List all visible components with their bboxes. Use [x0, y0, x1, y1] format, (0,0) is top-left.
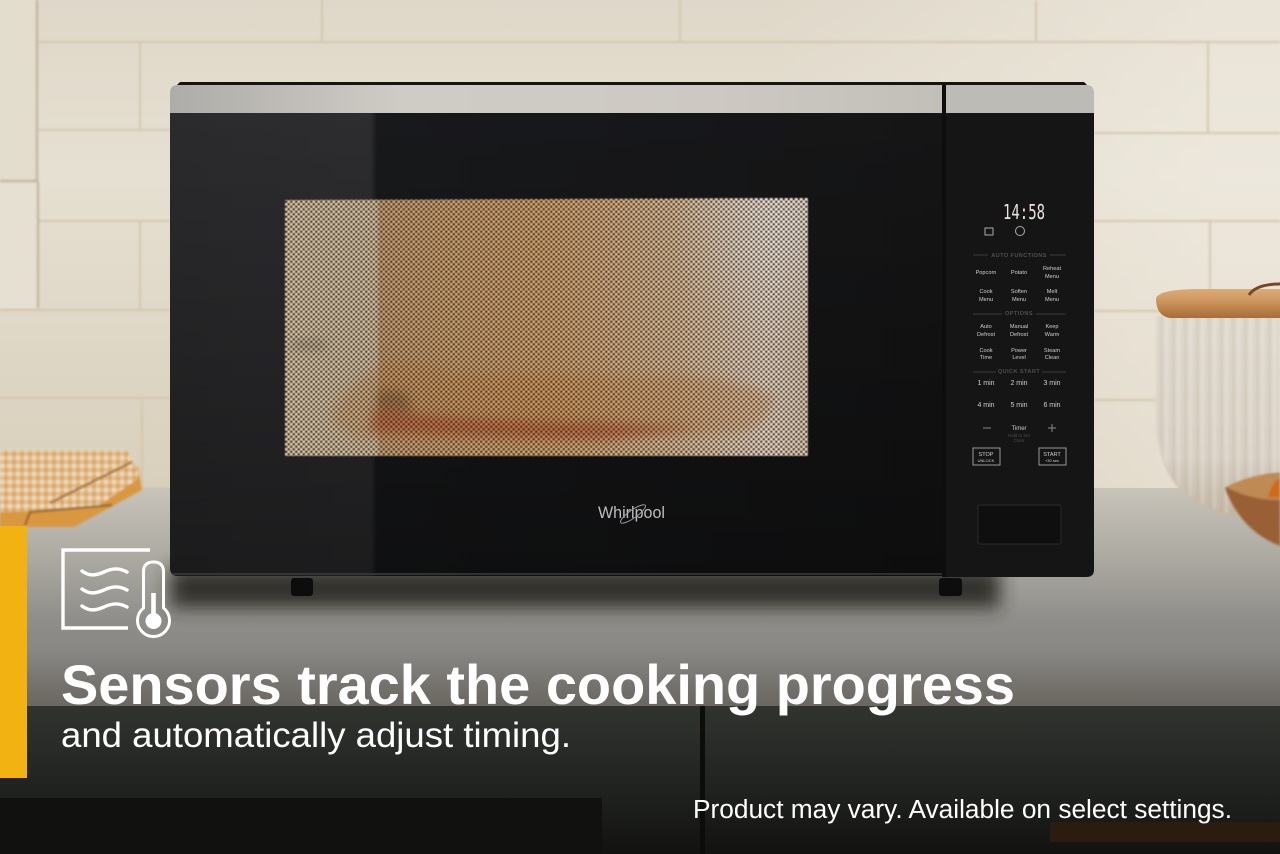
- section: auto functions: Menu: [1045, 274, 1059, 280]
- section: options: Power: [1011, 348, 1027, 354]
- microwave: [170, 82, 1094, 596]
- section: options: Level: [1012, 355, 1026, 361]
- section: options: Auto: [980, 324, 992, 330]
- microwave feet: [291, 578, 962, 596]
- section: options: Defrost: [977, 332, 995, 338]
- section: quick start: QUICK START: [998, 369, 1040, 375]
- section: quick start: 5 min: [1010, 402, 1028, 409]
- section: options: Keep: [1045, 324, 1059, 330]
- icon: sensor waves and thermometer: [63, 550, 169, 636]
- disclaimer: Product may vary. Available on select settings.: [693, 796, 1232, 824]
- section: auto functions: Menu: [1045, 297, 1059, 303]
- section: options: Manual: [1010, 324, 1028, 330]
- cabinets below the counter: [0, 706, 1280, 854]
- section: options: Warm: [1045, 332, 1060, 338]
- stop and start buttons: UNLOCK: [978, 458, 995, 463]
- section: auto functions: Menu: [1012, 297, 1026, 303]
- headline: Sensors track the cooking progress: [61, 653, 1015, 716]
- section: auto functions: Reheat: [1043, 266, 1061, 272]
- status icons: [985, 226, 1024, 236]
- section: options: Time: [980, 355, 992, 361]
- section: auto functions: AUTO FUNCTIONS: [991, 253, 1047, 259]
- subheading: and automatically adjust timing.: [61, 715, 571, 755]
- section: options: Steam: [1044, 348, 1060, 354]
- stop and start buttons: [973, 448, 1066, 465]
- wooden bowl: [1225, 473, 1280, 546]
- control panel body: [946, 113, 1094, 577]
- section: auto functions: Soften: [1011, 289, 1027, 295]
- background: tiled kitchen wall: [0, 0, 1280, 500]
- stop and start buttons: START: [1043, 452, 1061, 458]
- section: auto functions: Cook: [979, 289, 993, 295]
- steel handle strip: [170, 85, 1094, 113]
- timer controls: Timer: [1011, 426, 1027, 432]
- section: quick start: 4 min: [977, 402, 995, 409]
- section: options: OPTIONS: [1005, 311, 1033, 317]
- clock display: 14:58: [1003, 200, 1045, 224]
- folded towel: [0, 451, 142, 527]
- yellow accent bar: [0, 526, 27, 778]
- section: options: Defrost: [1010, 332, 1028, 338]
- section: quick start: 1 min: [977, 380, 995, 387]
- timer controls: [983, 424, 1056, 443]
- section: options: Cook: [979, 348, 993, 354]
- section: quick start: 2 min: [1010, 380, 1028, 387]
- control panel: [973, 200, 1066, 544]
- section: auto functions: Melt: [1047, 289, 1058, 295]
- section: options: Clean: [1045, 355, 1059, 361]
- section: quick start: 3 min: [1043, 380, 1061, 387]
- window with mesh: [285, 198, 808, 456]
- section: auto functions: [973, 253, 1066, 372]
- section: options: [977, 311, 1060, 361]
- door release button: [978, 505, 1061, 544]
- timer controls: Hold to Set: [1008, 433, 1031, 438]
- stop and start buttons: STOP: [979, 452, 994, 458]
- food behind the mesh: [293, 345, 775, 441]
- section: auto functions: Menu: [979, 297, 993, 303]
- microwave top edge: [174, 82, 1090, 88]
- countertop: [0, 488, 1280, 708]
- section: auto functions: Potato: [1011, 270, 1027, 276]
- section: quick start: [977, 369, 1061, 409]
- ceramic canister with wooden lid: [1156, 284, 1280, 516]
- stop and start buttons: +30 sec: [1045, 458, 1059, 463]
- door: [170, 113, 942, 576]
- section: quick start: 6 min: [1043, 402, 1061, 409]
- section: auto functions: Popcorn: [976, 270, 996, 276]
- microwave shadow on counter: [170, 568, 1000, 608]
- timer controls: Clock: [1014, 438, 1025, 443]
- brand logo: Whirlpool: [598, 503, 665, 522]
